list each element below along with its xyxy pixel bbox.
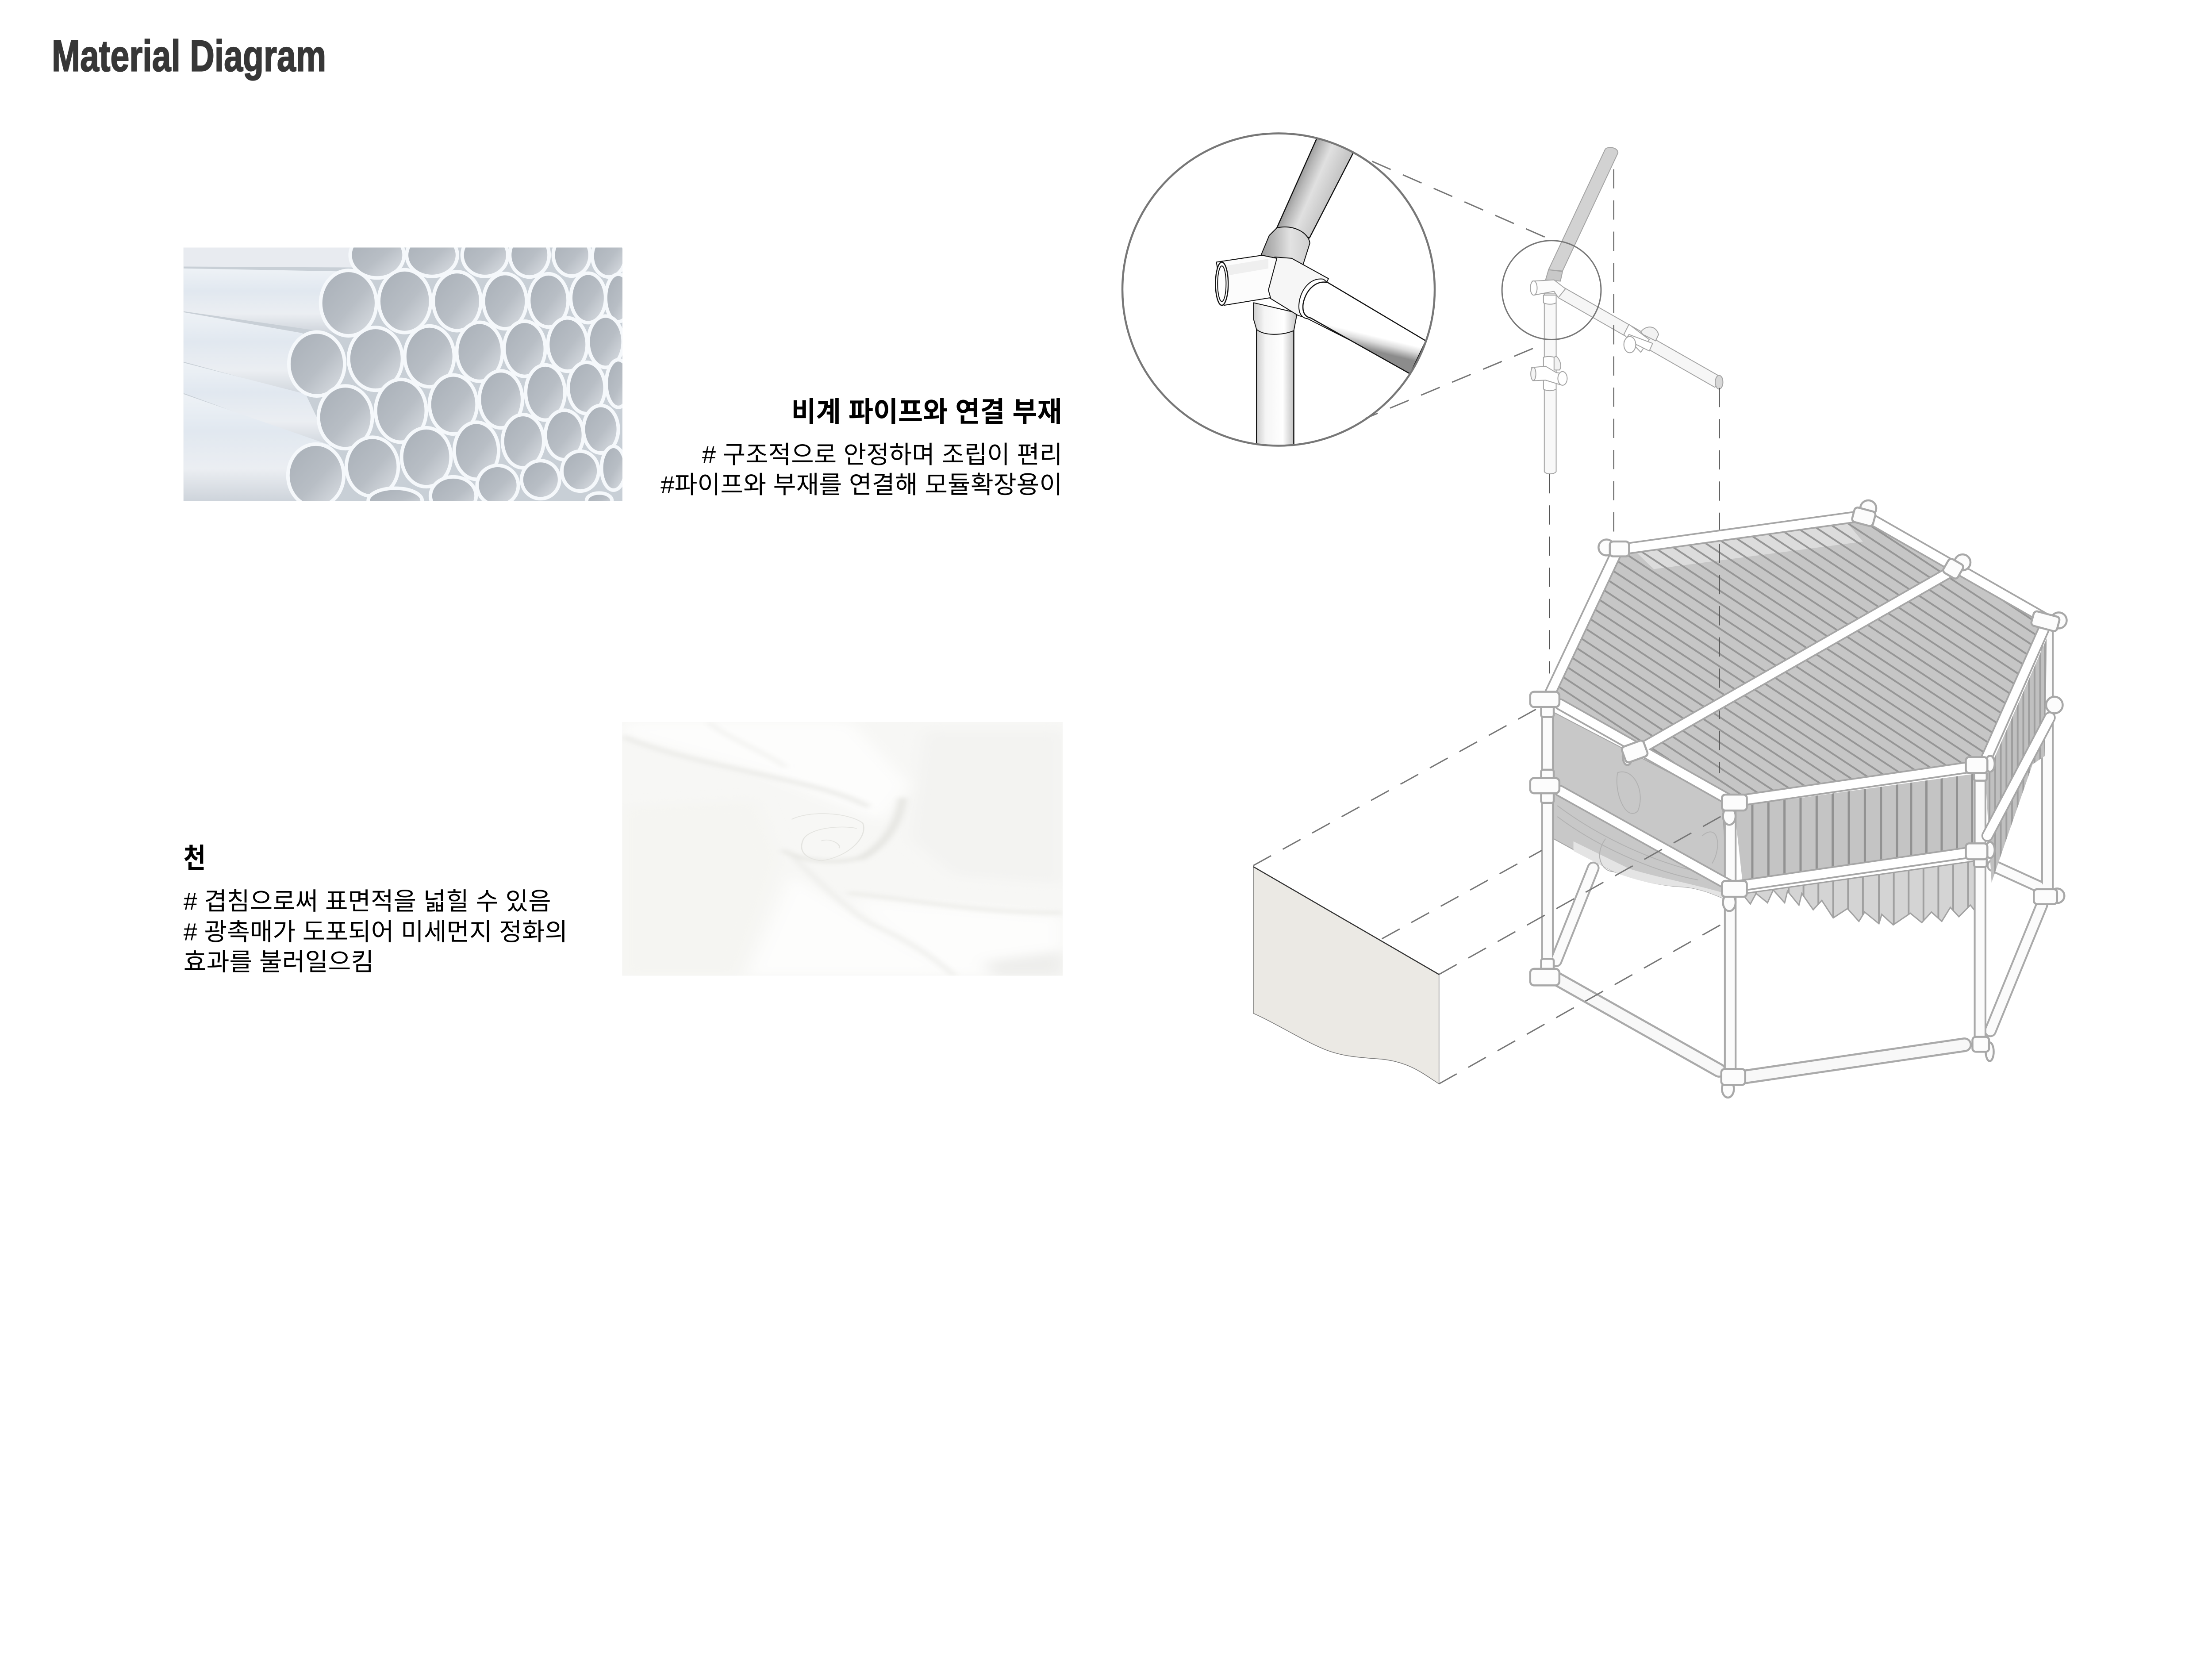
fabric: hanging strips below frame: [1744, 860, 1974, 926]
text: pipe description: # 구조적으로 안정하며 조립이 편리: [702, 441, 1062, 469]
fabric: left draped panel: [1553, 712, 1728, 901]
projection dashed lines: joint and pipe: [1366, 161, 1550, 418]
detail: magnified pipe joint in circle: [1122, 134, 1435, 446]
text: cloth description: [184, 887, 568, 976]
heading: cloth: 천: [184, 843, 206, 874]
fabric: slatted roof panel: [1558, 523, 2038, 794]
title: Material Diagram: [52, 31, 326, 80]
fabric: side panel: [1986, 638, 2047, 883]
text: cloth description: 효과를 불러일으킴: [184, 949, 374, 976]
projection dashed lines: cloth to frame: [1253, 706, 1724, 1084]
text: pipe description: [661, 441, 1062, 499]
photo: stacked white PVC pipes: [184, 232, 631, 515]
frame: scaffold pipes: [1550, 515, 2050, 1077]
text: pipe description: #파이프와 부재를 연결해 모듈확장용이: [661, 471, 1062, 499]
fabric: front slatted panel: [1736, 774, 1974, 879]
detail: small pipe assembly with zoom ring: [1502, 147, 1723, 474]
text: cloth description: # 광촉매가 도포되어 미세먼지 정화의: [184, 918, 568, 945]
heading: scaffold pipes: 비계 파이프와 연결 부재: [791, 397, 1062, 428]
frame: back legs and braces: [1548, 620, 2047, 1077]
projection dashed line: through roof: [1719, 388, 1720, 773]
frame: pipe joints: [1530, 500, 2067, 1098]
projection dashed lines: vertical: [1549, 169, 1614, 673]
text: cloth description: # 겹침으로써 표면적을 넓힐 수 있음: [184, 887, 551, 915]
cloth swatch: [1253, 867, 1439, 1084]
photo: white cloth: [622, 722, 1063, 976]
